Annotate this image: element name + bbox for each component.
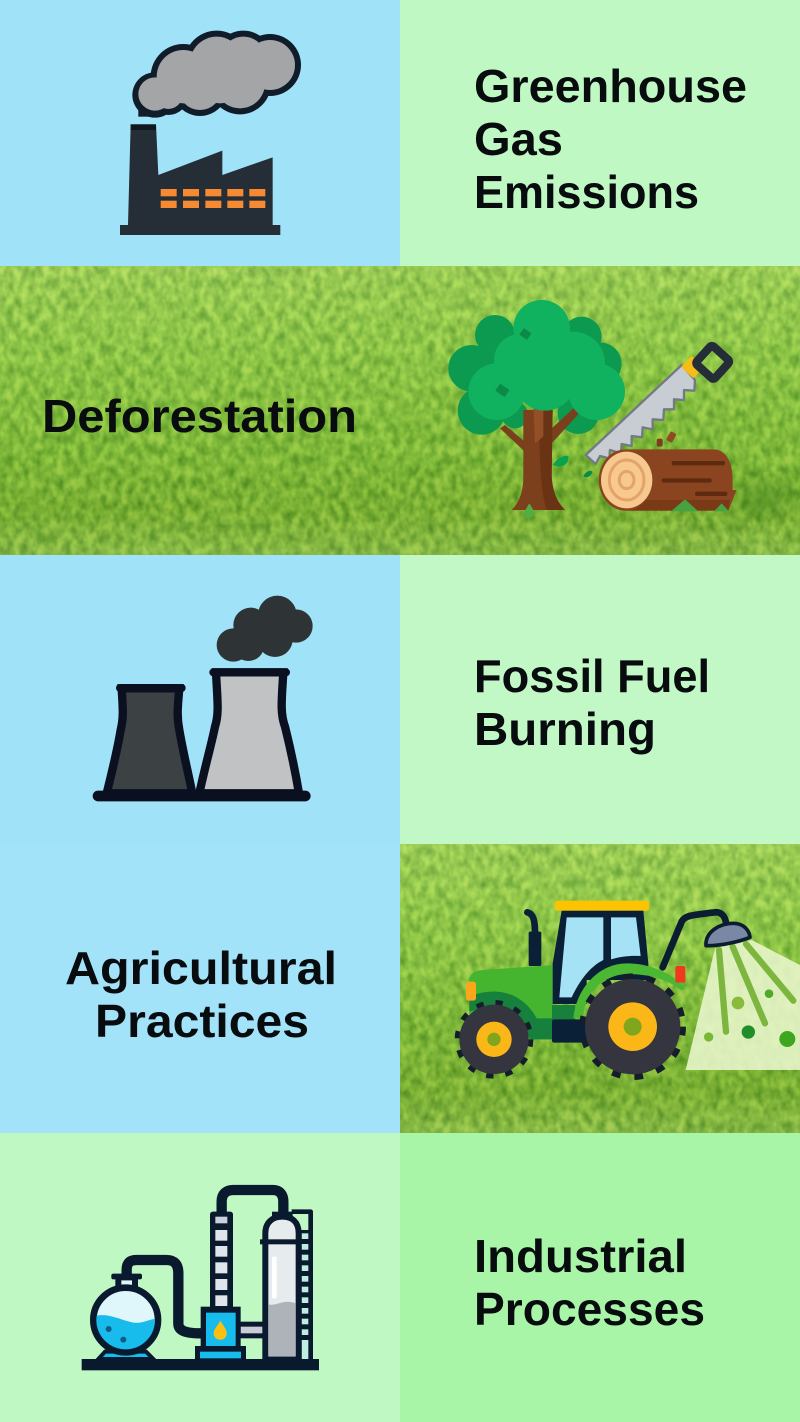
heading: Greenhouse Gas Emissions: Emissions: [474, 166, 699, 218]
heading: Agricultural Practices: [65, 942, 337, 1047]
panel: greenhouse gas title: [400, 0, 800, 266]
panel: industrial illustration: [0, 1133, 400, 1422]
icon: tractor: [457, 901, 685, 1077]
icon: factory with smoke cloud: [120, 31, 301, 235]
heading: Agricultural Practices: Agricultural: [65, 942, 337, 994]
icon: cut log: [599, 431, 737, 511]
flask: [93, 1274, 160, 1359]
icon: cooling towers with smoke: [98, 596, 313, 796]
icon: chemical plant: [82, 1190, 319, 1370]
panel: fossil fuel illustration: [0, 555, 400, 844]
base platform: [82, 1359, 319, 1370]
heading: Fossil Fuel Burning: Fossil Fuel: [474, 650, 710, 702]
icon: tree: [448, 300, 625, 520]
column: [210, 1212, 233, 1310]
heading: Fossil Fuel Burning: Burning: [474, 703, 656, 755]
panel: agricultural title: [0, 844, 400, 1133]
panel: deforestation title: [0, 266, 400, 555]
heading: Industrial Processes: [474, 1230, 705, 1335]
pump box: [195, 1307, 264, 1359]
panel: greenhouse gas illustration: [0, 0, 400, 266]
heading: Deforestation: Deforestation: [42, 390, 357, 442]
icon: hand saw: [586, 345, 730, 464]
panel: deforestation illustration: [400, 266, 800, 555]
heading: Industrial Processes: Industrial: [474, 1230, 687, 1282]
heading: Fossil Fuel Burning: [474, 650, 710, 755]
panel: agricultural illustration: [400, 844, 800, 1133]
panel: industrial title: [400, 1133, 800, 1422]
heading: Agricultural Practices: Practices: [95, 995, 309, 1047]
connecting pipes: [127, 1190, 283, 1333]
panel: fossil fuel title: [400, 555, 800, 844]
heading: Greenhouse Gas Emissions: Gas: [474, 113, 563, 165]
heading: Industrial Processes: Processes: [474, 1283, 705, 1335]
heading: Greenhouse Gas Emissions: Greenhouse: [474, 60, 747, 112]
heading: Greenhouse Gas Emissions: [474, 60, 747, 218]
storage tank: [260, 1212, 301, 1359]
icon: pesticide spray: [663, 912, 800, 1070]
ladder: [292, 1212, 311, 1359]
